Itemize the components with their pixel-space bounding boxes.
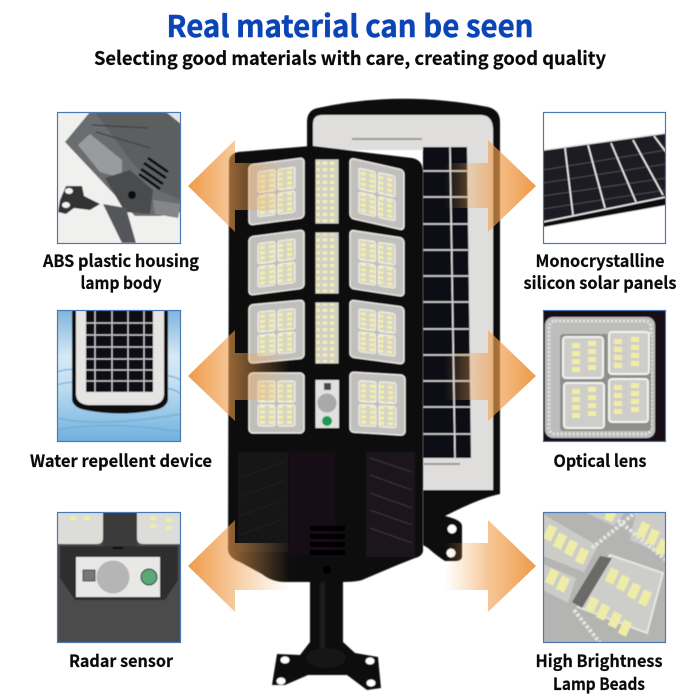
lamp rear with solar panel [307,99,500,561]
label: Optical lens [554,447,646,472]
panel: water repellent device [30,310,212,472]
arrow: right 1 [445,140,536,232]
panel: radar sensor [57,512,181,672]
arrow: right 3 [445,520,536,612]
panel: solar panels: silicon solar panels [524,269,676,294]
panel: ABS plastic housing: lamp body [80,269,162,294]
label: Radar sensor [69,647,174,672]
label: High Brightness [536,647,662,672]
subtitle: Selecting good materials with care, creating good quality [94,44,606,71]
panel: ABS plastic housing [42,112,199,294]
arrow: left 2 [188,330,290,421]
label: ABS plastic housing [42,247,199,272]
panel: solar panels [524,112,676,294]
lamp pole and bracket [272,553,381,690]
arrow: left 1 [188,140,290,232]
white backing [313,115,493,490]
arrow: right 2 [445,330,536,421]
label: Monocrystalline [536,247,665,272]
label: Water repellent device [30,447,212,472]
vents [310,526,345,555]
front LED modules [249,158,405,435]
lamp front body [228,146,423,582]
title: Real material can be seen [166,2,534,46]
panel: high brightness lamp beads: Lamp Beads [553,670,645,695]
solar cells [423,147,471,458]
centre LED strips [316,160,338,363]
panel: high brightness lamp beads [536,510,669,695]
sensor plate [316,380,339,428]
chevron ribs [240,458,412,543]
panel: optical lens [543,310,666,472]
arrow: left 3 [188,520,290,612]
mounting holes [448,524,456,534]
